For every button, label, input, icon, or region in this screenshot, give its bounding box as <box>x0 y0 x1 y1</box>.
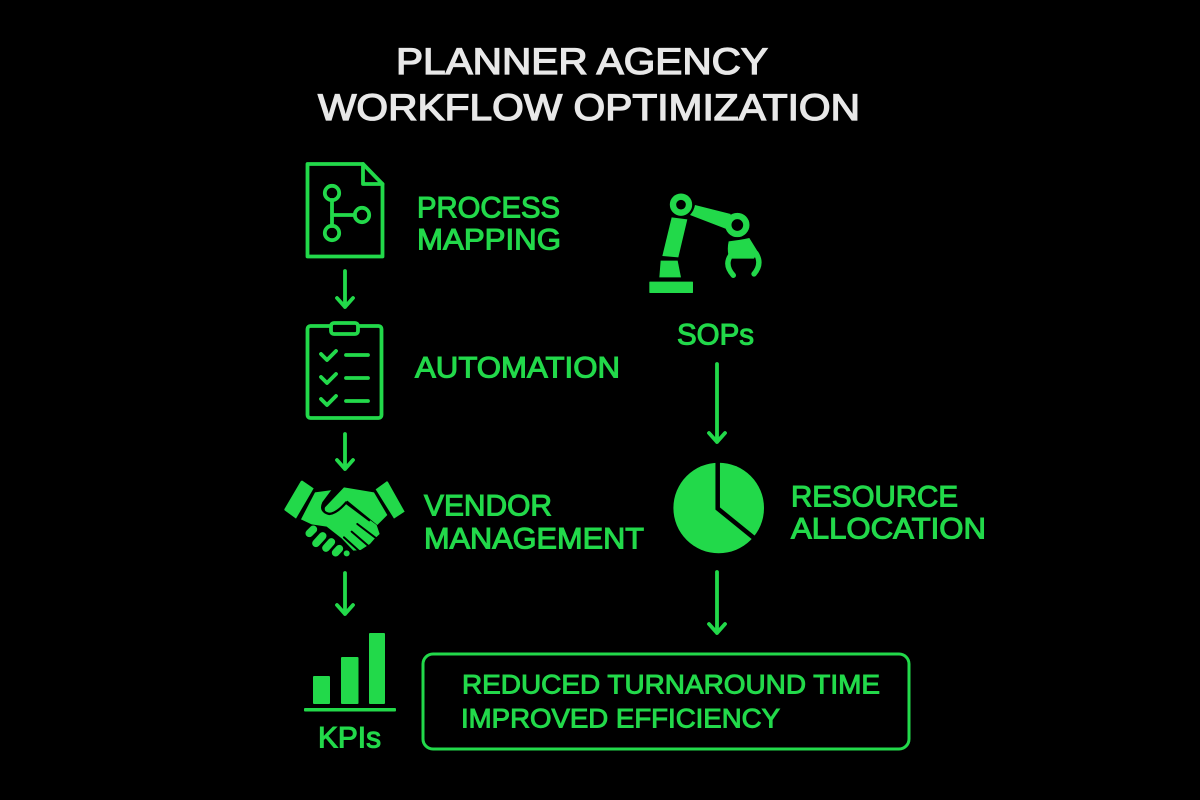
label: resource allocation: ALLOCATION <box>791 512 986 546</box>
arrow: automation to vendor management <box>337 434 353 469</box>
label: SOPs: SOPs <box>677 318 754 352</box>
label: resource allocation: RESOURCE <box>791 480 958 514</box>
icon: pie chart <box>673 460 764 553</box>
text: outcomes <box>461 670 880 734</box>
label: vendor management: MANAGEMENT <box>424 522 644 556</box>
arrow: resource allocation to results <box>709 572 725 633</box>
title: WORKFLOW OPTIMIZATION <box>318 87 860 128</box>
label: process mapping: MAPPING <box>417 224 561 256</box>
icon: robotic arm <box>649 197 759 293</box>
label: resource allocation <box>791 480 986 546</box>
text: outcomes: REDUCED TURNAROUND TIME <box>462 670 880 700</box>
arrow: vendor management to KPIs <box>337 573 353 614</box>
icon: clipboard checklist <box>308 323 382 418</box>
icon: KPI bar chart <box>304 633 396 712</box>
label: automation: AUTOMATION <box>415 352 620 384</box>
label: process mapping: PROCESS <box>417 192 560 224</box>
title <box>318 41 860 128</box>
panel: results <box>423 654 909 749</box>
arrow: SOPs to resource allocation <box>709 364 725 442</box>
text: outcomes: IMPROVED EFFICIENCY <box>461 704 780 734</box>
icon: handshake <box>284 481 405 556</box>
icon: process document <box>308 164 382 256</box>
label: vendor management <box>424 490 644 556</box>
arrow: process mapping to automation <box>337 271 353 307</box>
label: process mapping <box>417 192 561 256</box>
title: PLANNER AGENCY <box>396 41 768 82</box>
label: vendor management: VENDOR <box>424 490 552 522</box>
label: KPIs: KPIs <box>318 722 381 754</box>
